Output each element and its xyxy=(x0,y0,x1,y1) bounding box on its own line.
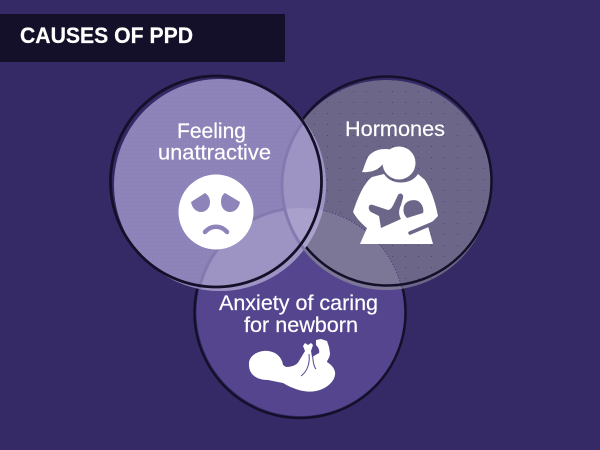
outline of feeling circle xyxy=(110,76,322,287)
icon: newborn baby xyxy=(249,339,335,392)
outline of hormones circle xyxy=(282,76,492,286)
panel: anxiety circle xyxy=(194,207,406,418)
infographic canvas xyxy=(0,14,493,420)
icon: mother holding baby xyxy=(353,146,438,244)
panel: feeling unattractive circle xyxy=(114,79,326,291)
heading: feeling unattractive xyxy=(158,119,271,164)
heading: hormones: Hormones xyxy=(345,117,445,141)
heading: anxiety of caring for newborn: for newborn xyxy=(244,313,358,337)
panel: hormones circle xyxy=(281,80,491,290)
title banner xyxy=(0,14,285,62)
overlap: feeling and hormones xyxy=(280,120,326,250)
heading: anxiety of caring for newborn xyxy=(219,291,378,337)
overlap: feeling and anxiety xyxy=(198,208,306,291)
title banner: CAUSES OF PPD xyxy=(20,23,193,48)
heading: anxiety of caring for newborn: Anxiety of caring xyxy=(219,291,378,315)
heading: feeling unattractive: Feeling xyxy=(177,119,246,143)
heading: feeling unattractive: unattractive xyxy=(158,140,271,164)
icon: sad face xyxy=(178,174,254,250)
overlap: hormones and anxiety xyxy=(304,210,402,290)
